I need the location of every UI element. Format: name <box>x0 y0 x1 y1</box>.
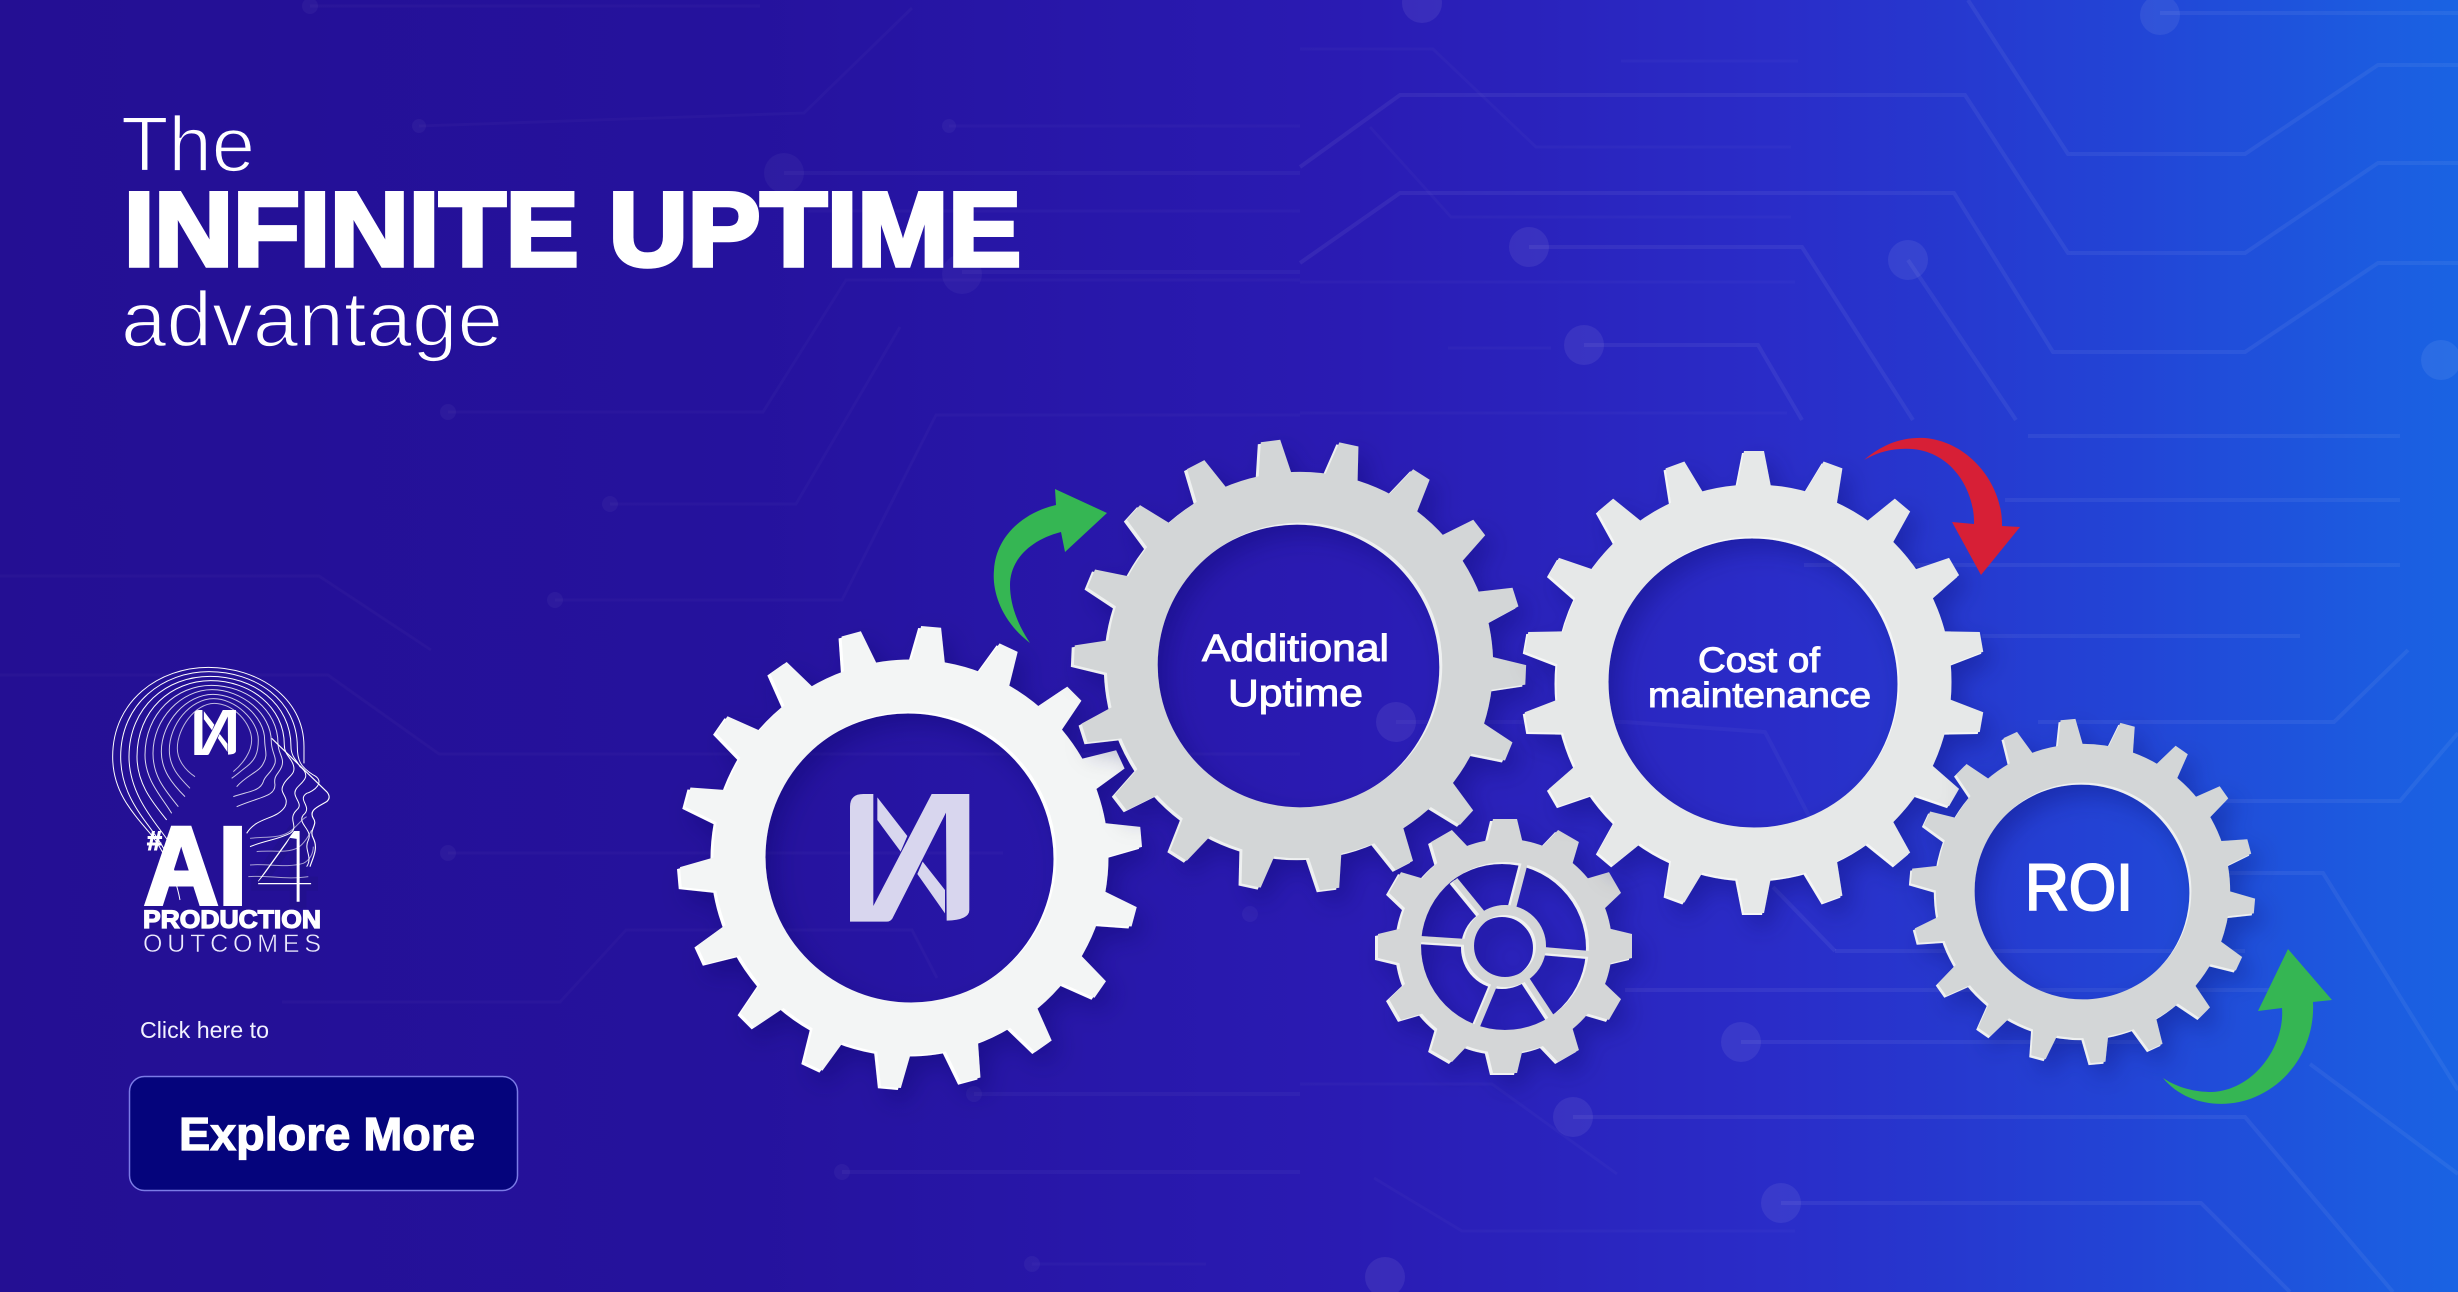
label: Additional Uptime <box>1202 628 1389 715</box>
icon: logo mark <box>850 794 969 922</box>
arrow: green up right <box>2163 949 2332 1104</box>
label: ROI: ROI <box>2025 850 2133 924</box>
arrow: green up <box>994 489 1107 643</box>
call to action label: Click here to <box>140 1017 269 1043</box>
logo numeral 4: 4 <box>252 804 318 929</box>
logo text: hash: # <box>147 826 162 856</box>
label: Cost of maintenance <box>1648 641 1871 715</box>
button: Explore More <box>130 1076 518 1190</box>
label: Additional Uptime: Uptime <box>1228 673 1363 715</box>
arrow: red down <box>1864 438 2020 575</box>
gear: Additional Uptime <box>1028 396 1569 936</box>
title <box>121 100 1021 363</box>
label: Cost of maintenance: Cost of <box>1698 641 1820 680</box>
label: Cost of maintenance: maintenance <box>1648 676 1871 715</box>
title line: INFINITE UPTIME: INFINITE UPTIME <box>124 172 1021 288</box>
logo mark in head <box>194 710 236 755</box>
gear: Cost of maintenance <box>1521 451 1985 915</box>
gear: small spoked wheel <box>1375 819 1632 1075</box>
circuit trace background <box>1300 0 2458 1292</box>
logo text: OUTCOMES: OUTCOMES <box>143 930 321 958</box>
title line: advantage: advantage <box>121 275 503 363</box>
gear: Infinite Uptime logo <box>658 607 1161 1109</box>
label: Additional Uptime: Additional <box>1202 628 1389 670</box>
logo text: AI: AI <box>144 805 247 928</box>
campaign logo: AI4 Production Outcomes <box>113 667 329 958</box>
head contour lines <box>113 667 329 900</box>
button: Explore More: Explore More <box>179 1108 475 1160</box>
title line: The: The <box>121 100 255 188</box>
gear: ROI <box>1895 705 2269 1079</box>
logo text: PRODUCTION: PRODUCTION <box>143 906 321 934</box>
